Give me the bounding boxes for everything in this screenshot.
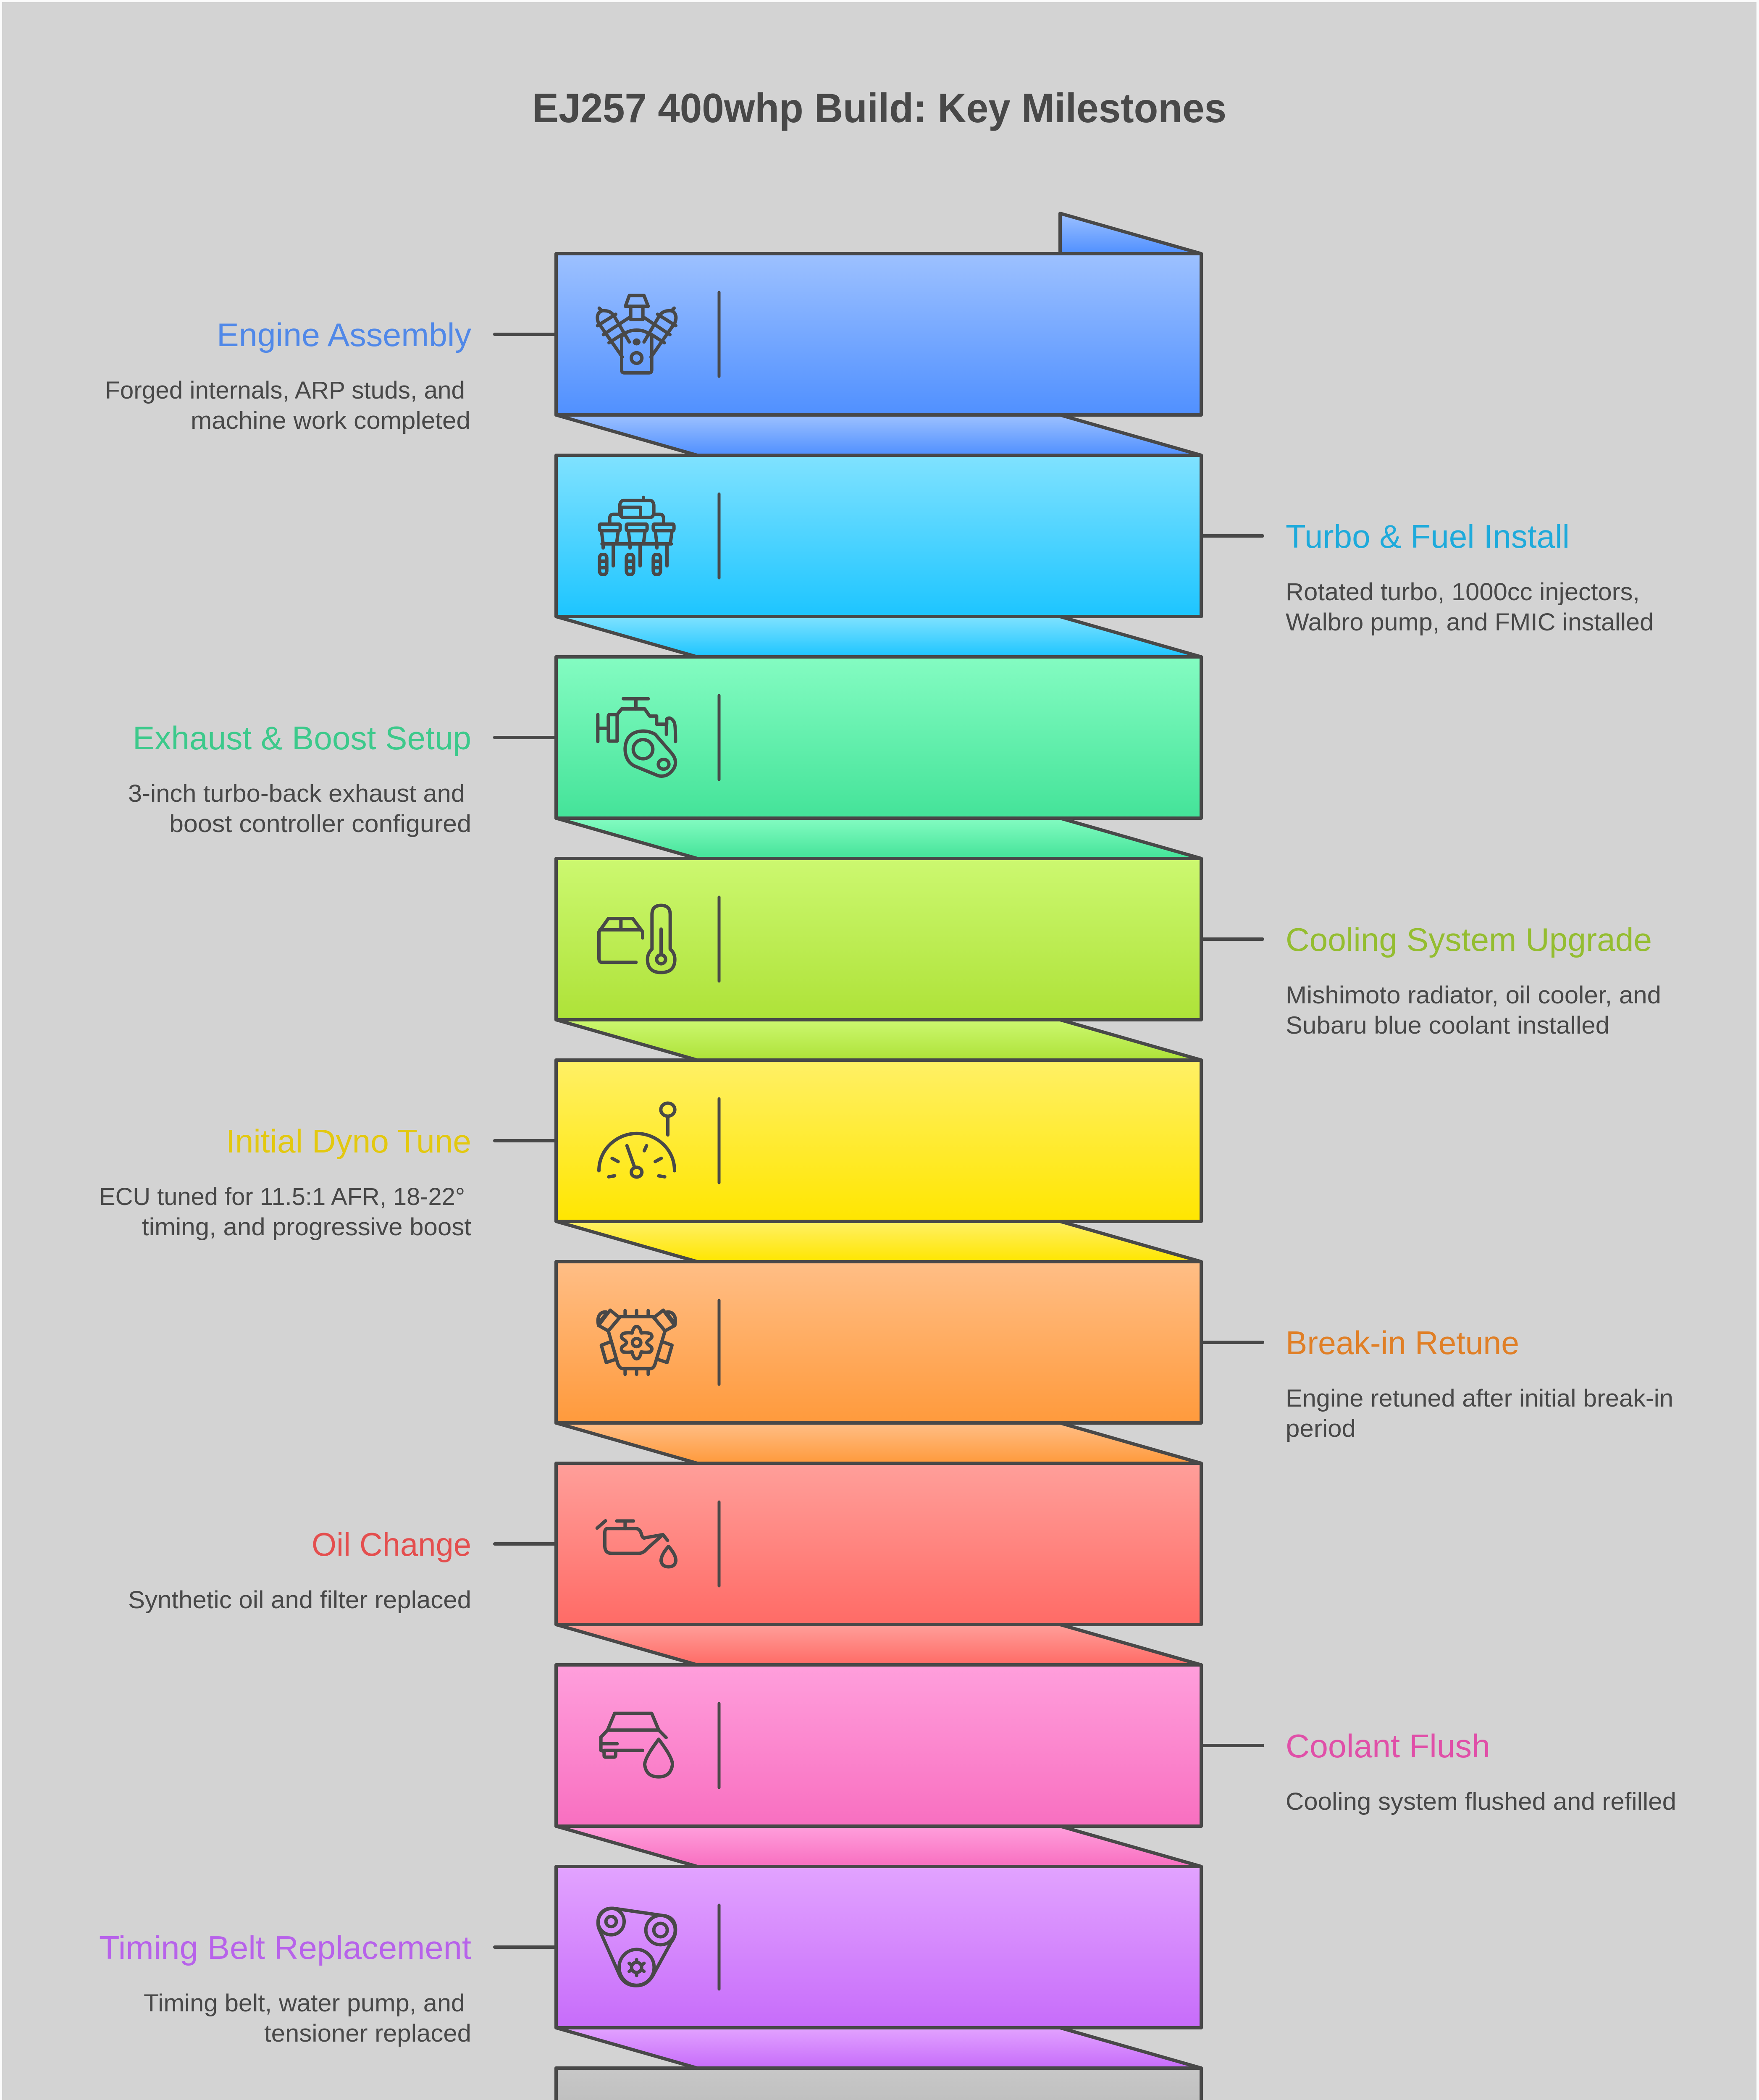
text: Exhaust & Boost Setup: Exhaust & Boost Setup (133, 719, 471, 756)
text: Initial Dyno Tune: ECU tuned for 11.5:1 AFR, 18-22° (99, 1183, 465, 1210)
text: Cooling System Upgrade (1286, 921, 1661, 1039)
text: Break-in Retune: Break-in Retune (1286, 1324, 1519, 1361)
text: Engine Assembly: Forged internals, ARP studs, and (105, 377, 465, 404)
text: Engine Assembly: Engine Assembly (217, 316, 471, 353)
text: Engine Assembly: machine work completed (191, 407, 470, 434)
text: Initial Dyno Tune: Initial Dyno Tune (226, 1123, 471, 1160)
text: Coolant Flush: Coolant Flush (1286, 1727, 1490, 1764)
band: Timing Belt Replacement (556, 1866, 1201, 2028)
band: Exhaust & Boost Setup (556, 657, 1201, 818)
icon: exhaust manifold (598, 699, 675, 776)
band: Cooling System Upgrade (556, 858, 1201, 1020)
text: Oil Change (128, 1526, 471, 1614)
text: Timing Belt Replacement: Timing Belt Replacement (99, 1929, 471, 1966)
text: Coolant Flush (1286, 1727, 1676, 1815)
text: Oil Change: Oil Change (312, 1526, 471, 1563)
band: Oil Change (556, 1463, 1201, 1625)
band: Engine Assembly (556, 254, 1201, 415)
text: Timing Belt Replacement: Timing belt, water pump, and (144, 1990, 465, 2017)
title: EJ257 400whp Build: Key Milestones (532, 85, 1226, 131)
text: Break-in Retune (1286, 1324, 1673, 1442)
band dividers (717, 292, 721, 2100)
text: Turbo & Fuel Install: Walbro pump, and FMIC installed (1286, 609, 1654, 636)
icon: car with coolant drop (601, 1713, 672, 1777)
text: Initial Dyno Tune (99, 1123, 471, 1241)
text: Exhaust & Boost Setup: 3-inch turbo-back exhaust and (128, 780, 465, 807)
text: Exhaust & Boost Setup (128, 719, 471, 837)
ribbon folds (556, 213, 1201, 2100)
text: Break-in Retune: period (1286, 1415, 1356, 1442)
icon: oil can (597, 1521, 676, 1567)
text: Initial Dyno Tune: timing, and progressive boost (142, 1213, 471, 1241)
text: Break-in Retune: Engine retuned after initial break-in (1286, 1385, 1673, 1412)
text: Turbo & Fuel Install: Rotated turbo, 1000cc injectors, (1286, 578, 1640, 606)
connector lines (495, 334, 1263, 2100)
band: Real-time Monitoring (556, 2068, 1201, 2100)
text: Timing Belt Replacement (99, 1929, 471, 2047)
text: Cooling System Upgrade: Cooling System Upgrade (1286, 921, 1652, 958)
text: Oil Change: Synthetic oil and filter replaced (128, 1586, 471, 1614)
icon: engine with gear (598, 1310, 675, 1374)
text: Turbo & Fuel Install (1286, 518, 1654, 636)
text: Coolant Flush: Cooling system flushed and refilled (1286, 1788, 1676, 1815)
band: Turbo & Fuel Install (556, 455, 1201, 617)
text: Cooling System Upgrade: Subaru blue coolant installed (1286, 1012, 1609, 1039)
band: Break-in Retune (556, 1262, 1201, 1423)
text: Cooling System Upgrade: Mishimoto radiator, oil cooler, and (1286, 982, 1661, 1009)
band: Coolant Flush (556, 1665, 1201, 1826)
icon: timing belt (598, 1908, 675, 1986)
icon: engine block (597, 296, 676, 373)
icon: dyno gauge with pin (599, 1103, 675, 1177)
icon: turbo and injectors (599, 497, 674, 575)
text: Engine Assembly (105, 316, 471, 434)
text: Turbo & Fuel Install: Turbo & Fuel Install (1286, 518, 1570, 555)
icon: coolant box and thermometer (599, 906, 675, 973)
band: Initial Dyno Tune (556, 1060, 1201, 1221)
text: Timing Belt Replacement: tensioner replaced (264, 2020, 471, 2047)
text: Exhaust & Boost Setup: boost controller configured (169, 810, 471, 837)
